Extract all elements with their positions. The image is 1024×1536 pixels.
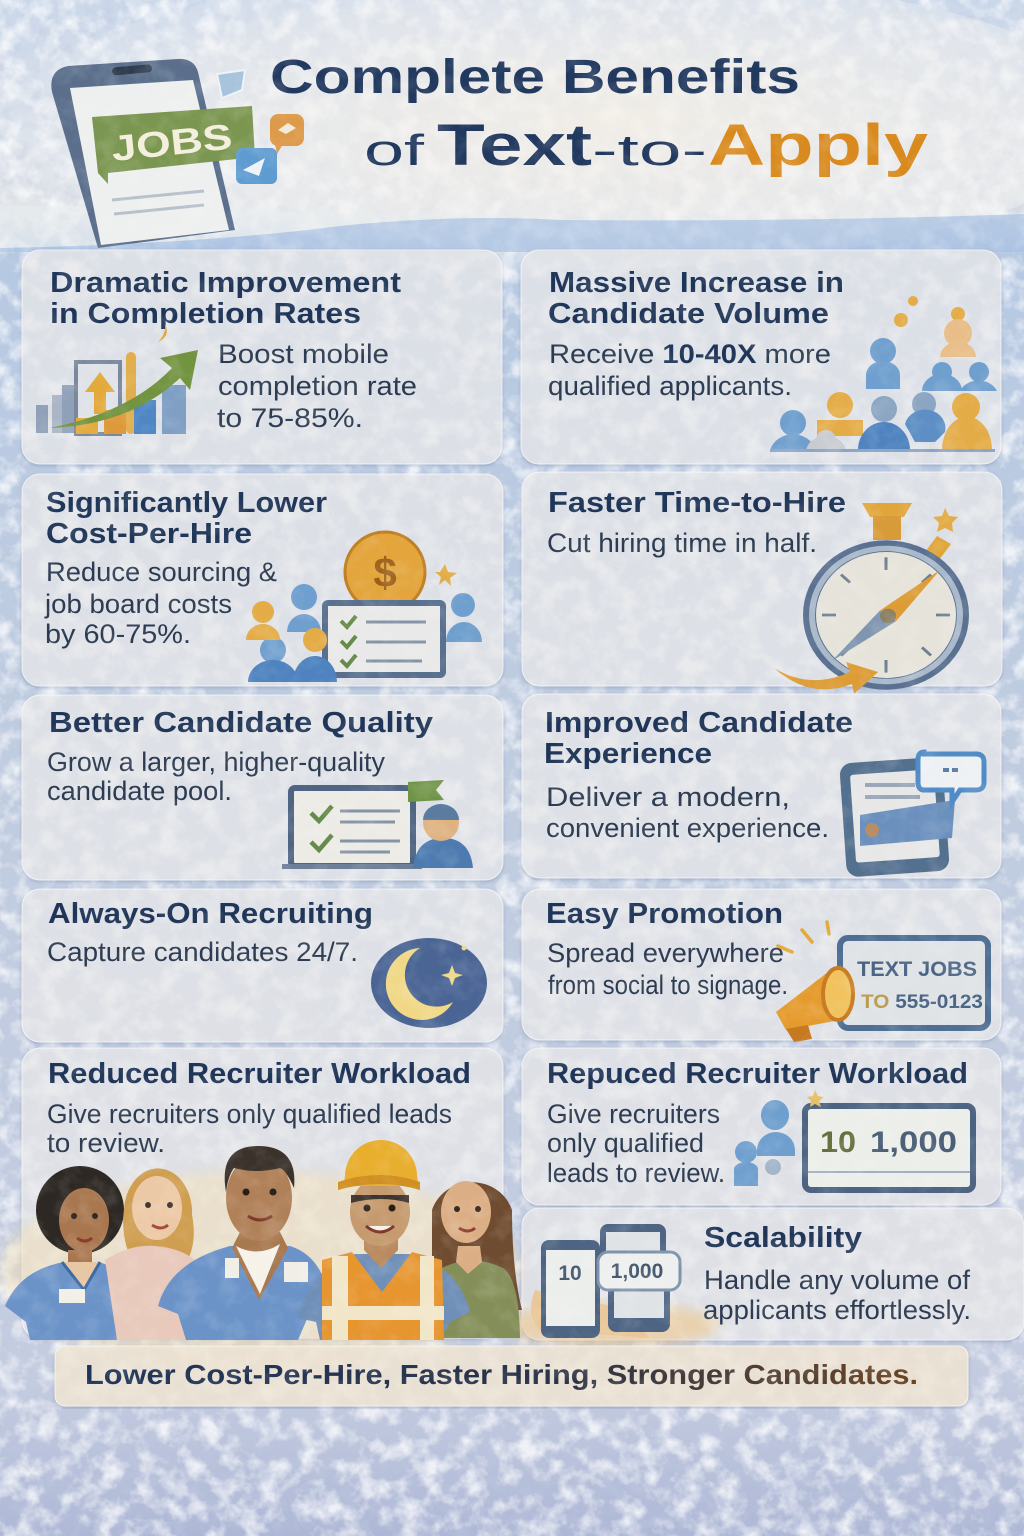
text: reduced workload: to review.	[47, 1128, 165, 1158]
worker: man in blue scrubs	[158, 1146, 330, 1340]
heading: time to hire: Faster Time-to-Hire	[548, 487, 846, 519]
text: easy promotion: from social to signage.	[548, 970, 788, 1000]
heading: candidate volume: Massive Increase in	[549, 267, 844, 299]
text: repuced workload: only qualified	[547, 1128, 704, 1158]
heading: cost per hire: Significantly Lower	[46, 487, 327, 519]
text: cost per hire: job board costs	[44, 589, 232, 619]
heading: scalability: Scalability	[704, 1222, 862, 1254]
icon: phone with chat	[839, 752, 984, 877]
panel: Better Candidate Quality	[22, 695, 503, 880]
icon: phone with JOBS bubble: JOBS	[109, 116, 234, 169]
text: always on: Capture candidates 24/7.	[47, 937, 358, 967]
text: completion rates: completion rate	[218, 371, 417, 401]
text: completion rates: Boost mobile	[218, 339, 389, 369]
heading: easy promotion: Easy Promotion	[546, 898, 783, 930]
text: reduced workload: Give recruiters only qualified leads	[47, 1099, 452, 1129]
heading: experience: Experience	[544, 738, 712, 770]
icon: rising bar chart	[36, 324, 198, 434]
heading: completion rates: Dramatic Improvement	[50, 267, 401, 299]
text: time to hire: Cut hiring time in half.	[547, 528, 817, 558]
icon: coin and checklist	[246, 532, 482, 682]
icon: moon and stars	[371, 938, 487, 1028]
worker: blonde woman	[105, 1168, 195, 1340]
icon: coin and checklist: $	[373, 549, 397, 596]
text: candidate volume: Receive 10-40X more	[549, 339, 825, 369]
panel: Scalability	[500, 1208, 1024, 1347]
title: Apply	[708, 113, 928, 178]
worker: woman in scrubs	[5, 1166, 149, 1340]
icon: phone with JOBS bubble	[51, 59, 304, 248]
worker: woman with long hair	[430, 1181, 522, 1338]
text: quality: Grow a larger, higher-quality	[47, 747, 385, 777]
panel: Easy Promotion	[522, 889, 1001, 1042]
icon: recruiter counter screen: 1,000	[870, 1126, 957, 1159]
icon: recruiter counter screen: 10	[820, 1126, 856, 1159]
text: candidate volume: qualified applicants.	[548, 371, 792, 401]
text: cost per hire: Reduce sourcing &	[46, 557, 277, 587]
text: cost per hire: by 60-75%.	[45, 619, 191, 649]
heading: candidate volume: Candidate Volume	[548, 298, 829, 330]
panel: Massive Increase in Candidate Volume	[521, 250, 1001, 464]
icon: stopwatch	[774, 503, 969, 694]
title: -to-	[592, 126, 707, 175]
panel: Faster Time-to-Hire	[522, 472, 1002, 694]
heading: experience: Improved Candidate	[545, 707, 853, 739]
panel: Significantly Lower Cost-Per-Hire	[22, 474, 503, 686]
text: scalability: applicants effortlessly.	[703, 1295, 971, 1325]
icon: scaling phones: 10	[558, 1262, 582, 1285]
heading: cost per hire: Cost-Per-Hire	[46, 518, 252, 550]
title: Complete Benefits	[270, 51, 800, 104]
illustration: group of workers	[0, 1140, 522, 1370]
panel: Reduced Recruiter Workload	[22, 1048, 503, 1338]
icon: scaling phones: 1,000	[611, 1260, 663, 1283]
panel: Always-On Recruiting	[22, 889, 503, 1042]
text: experience: convenient experience.	[546, 813, 829, 843]
panel: Improved Candidate Experience	[522, 694, 1001, 878]
text: completion rates: to 75-85%.	[217, 403, 363, 433]
icon: sign and megaphone: TEXT JOBS	[857, 958, 977, 981]
heading: always on: Always-On Recruiting	[48, 898, 373, 930]
icon: chat bubbles	[217, 70, 304, 184]
title: Text	[437, 113, 592, 178]
text: repuced workload: leads to review.	[547, 1158, 725, 1188]
icon: scaling phones	[531, 1224, 680, 1338]
icon: sign and megaphone	[776, 922, 988, 1042]
icon: checklist with recruiter	[282, 780, 473, 869]
icon: recruiter counter screen	[734, 1090, 973, 1190]
title: of	[364, 126, 425, 175]
text: quality: candidate pool.	[47, 776, 232, 806]
heading: completion rates: in Completion Rates	[50, 298, 361, 330]
panel: Repuced Recruiter Workload	[522, 1048, 1001, 1205]
title	[270, 51, 928, 178]
text: repuced workload: Give recruiters	[547, 1099, 720, 1129]
text: experience: Deliver a modern,	[546, 782, 790, 812]
panel: Dramatic Improvement in Completion Rates	[22, 250, 502, 464]
heading: repuced workload: Repuced Recruiter Workload	[547, 1058, 968, 1090]
text: scalability: Handle any volume of	[704, 1265, 971, 1295]
callout bar	[55, 1346, 968, 1406]
icon: crowd of candidates	[770, 296, 997, 452]
icon: sign and megaphone: TO 555-0123	[861, 992, 983, 1013]
heading: reduced workload: Reduced Recruiter Workload	[48, 1058, 471, 1090]
callout bar: Lower Cost-Per-Hire, Faster Hiring, Stronger Candidates.	[85, 1359, 918, 1390]
heading: quality: Better Candidate Quality	[49, 707, 433, 739]
worker: construction man with hard hat	[298, 1140, 470, 1340]
text: easy promotion: Spread everywhere	[547, 938, 784, 968]
